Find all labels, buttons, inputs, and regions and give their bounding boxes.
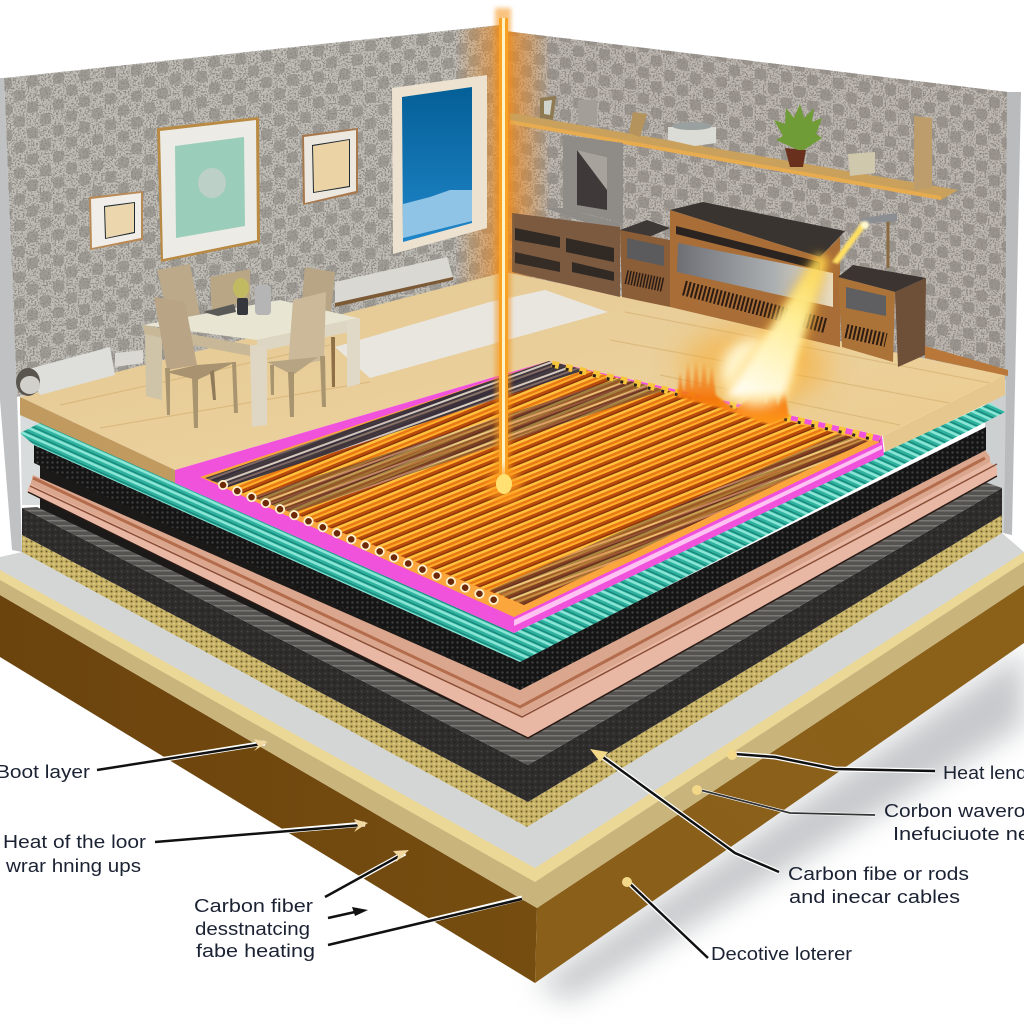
layer: black mesh <box>34 427 986 690</box>
wood front edge right <box>883 375 1005 453</box>
gold inner border <box>200 361 880 617</box>
vertical heat beam <box>486 8 522 503</box>
panel: left wall <box>0 25 500 552</box>
shelf with decor <box>510 96 958 200</box>
back edge tabs <box>552 364 880 439</box>
callout: Heat of the floor: Heat of the loor <box>3 832 146 852</box>
callout: Carbon fibe or rods <box>590 749 969 907</box>
dark band near right border <box>490 434 868 605</box>
heat flames <box>677 360 789 425</box>
slab shadow on ground <box>535 650 1024 1000</box>
brown base left face <box>0 595 537 983</box>
wood front edge left <box>20 397 175 483</box>
console: right cabinet <box>838 213 926 367</box>
front left chair <box>154 297 197 370</box>
roll behind table <box>335 257 453 307</box>
layer: teal membrane <box>20 403 1005 662</box>
console: small cabinet <box>620 220 670 307</box>
dark second band <box>252 378 665 513</box>
callout: Carbon fibe or rods: Carbon fibe or rods <box>788 864 969 884</box>
console: low media unit <box>512 213 620 297</box>
panel: base slab <box>0 533 1024 983</box>
dining set <box>143 264 360 428</box>
callout: Boot layer <box>0 739 268 782</box>
callout: Carbon fiber: desstnatcing <box>195 919 310 939</box>
picture: square frame <box>302 128 358 205</box>
console: large heater unit <box>670 202 845 347</box>
pink highlight on right arm <box>514 445 882 626</box>
layer: gold mesh <box>22 515 1002 827</box>
shelf items <box>540 96 556 120</box>
rug <box>335 290 608 378</box>
callout: Corbon waverol <box>692 785 1024 844</box>
callout: Heat lend <box>727 750 1024 783</box>
front edge loops <box>223 485 506 605</box>
plant <box>785 148 806 167</box>
brown base right face <box>535 585 1024 983</box>
callout: Decotive loterer <box>622 877 852 964</box>
callout: Heat of the floor: wrar hning ups <box>5 856 141 876</box>
layer: backing <box>40 440 985 760</box>
layer: dark foam <box>22 482 1002 802</box>
panel: wood floor <box>20 272 1005 483</box>
callout: Corbon waverol: Corbon waverol <box>884 801 1024 821</box>
table top <box>143 300 358 340</box>
baseboard right <box>925 346 1008 376</box>
heat flare from lamp <box>721 221 869 406</box>
window <box>392 75 487 254</box>
tv frame <box>545 135 623 235</box>
warm glow on floor <box>680 327 830 403</box>
callout: Heat lend: Heat lend <box>943 763 1024 783</box>
picture: small left frame <box>89 191 143 250</box>
callout: Corbon waverol: Inefuciuote ne <box>893 824 1024 844</box>
callout: Carbon fiber: fabe heating <box>196 941 315 961</box>
rolled insulation at left <box>16 347 143 396</box>
callout: Decotive loterer: Decotive loterer <box>711 944 852 964</box>
callout: Carbon fibe or rods: and inecar cables <box>789 887 960 907</box>
front right chair <box>288 292 326 367</box>
pink frame <box>175 361 884 633</box>
gold trim <box>0 552 1024 908</box>
dark cool wires near wood edge <box>205 361 585 487</box>
layer: copper sheets <box>27 450 997 738</box>
table legs <box>250 345 267 427</box>
back chairs <box>157 264 200 325</box>
table objects <box>203 304 236 316</box>
grey concrete surface <box>0 533 1024 868</box>
panel: heating element <box>175 361 884 633</box>
callout: Carbon fiber <box>194 850 522 961</box>
panel: right wall <box>505 31 1021 535</box>
callout: Carbon fiber: Carbon fiber <box>194 896 313 916</box>
picture: large mint artwork <box>157 117 260 262</box>
wire field <box>205 361 868 605</box>
callout: Heat of the floor <box>3 819 368 876</box>
